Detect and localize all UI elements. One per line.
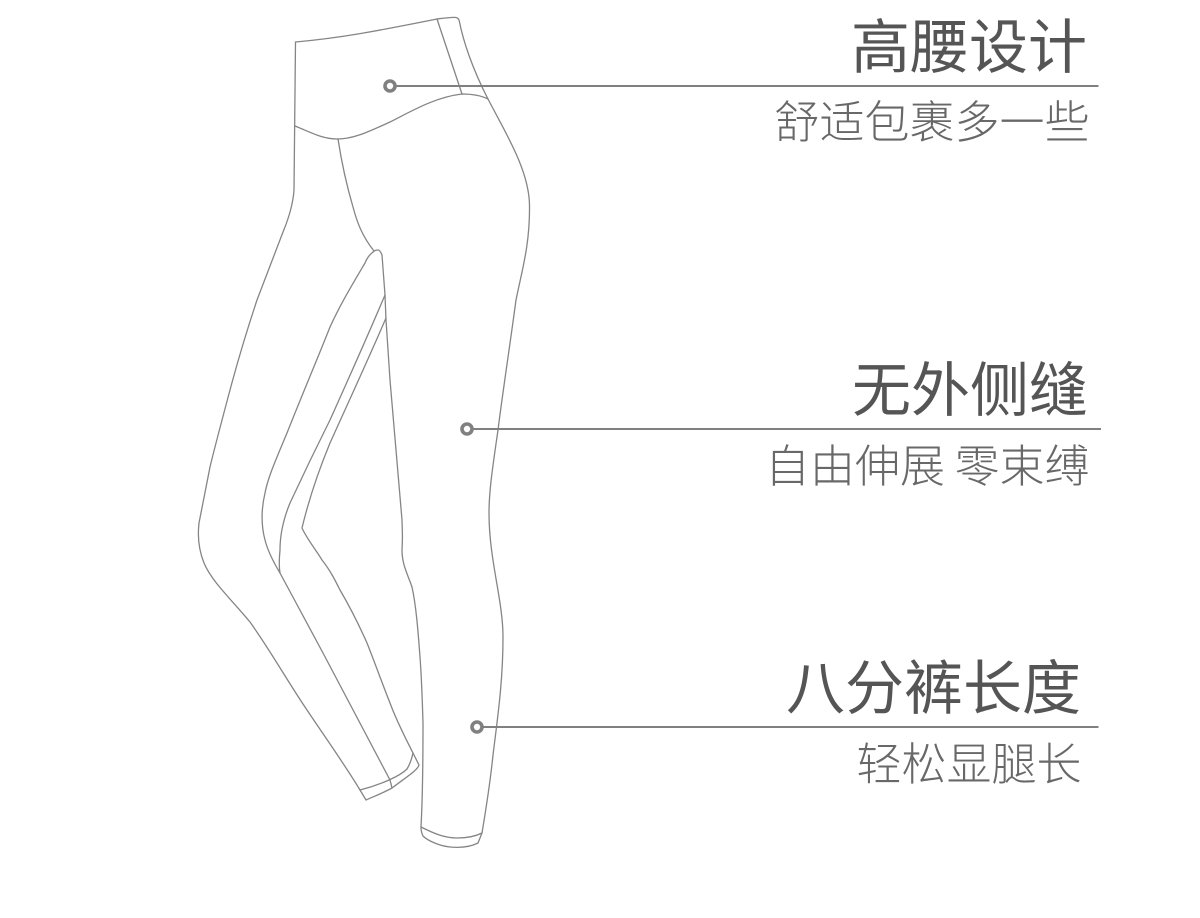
right leg hem	[421, 827, 482, 847]
left leg back contour	[302, 318, 419, 800]
left leg hem	[360, 753, 413, 790]
left leg inner panel	[262, 252, 392, 788]
left hip contour	[198, 42, 360, 790]
right leg outer contour	[482, 99, 530, 833]
leggings outline drawing	[198, 17, 530, 847]
subheading: 自由伸展 零束缚	[765, 441, 1090, 492]
marker dot	[462, 424, 472, 434]
leader line	[473, 428, 1101, 430]
crotch seam	[338, 139, 374, 251]
middle seam	[279, 295, 385, 573]
subheading: 舒适包裹多一些	[774, 97, 1090, 148]
heading: 无外侧缝	[852, 358, 1088, 424]
callout: high waist	[385, 15, 1098, 148]
heading: 八分裤长度	[786, 656, 1081, 722]
leader line	[396, 85, 1098, 87]
callout: cropped length	[472, 656, 1098, 790]
right leg inner contour	[373, 250, 423, 827]
waistband	[295, 17, 488, 139]
marker dot	[472, 722, 482, 732]
callout: no outer seam	[462, 358, 1101, 492]
subheading: 轻松显腿长	[856, 739, 1082, 790]
leader line	[483, 726, 1098, 728]
marker dot	[385, 81, 395, 91]
heading: 高腰设计	[851, 15, 1087, 81]
